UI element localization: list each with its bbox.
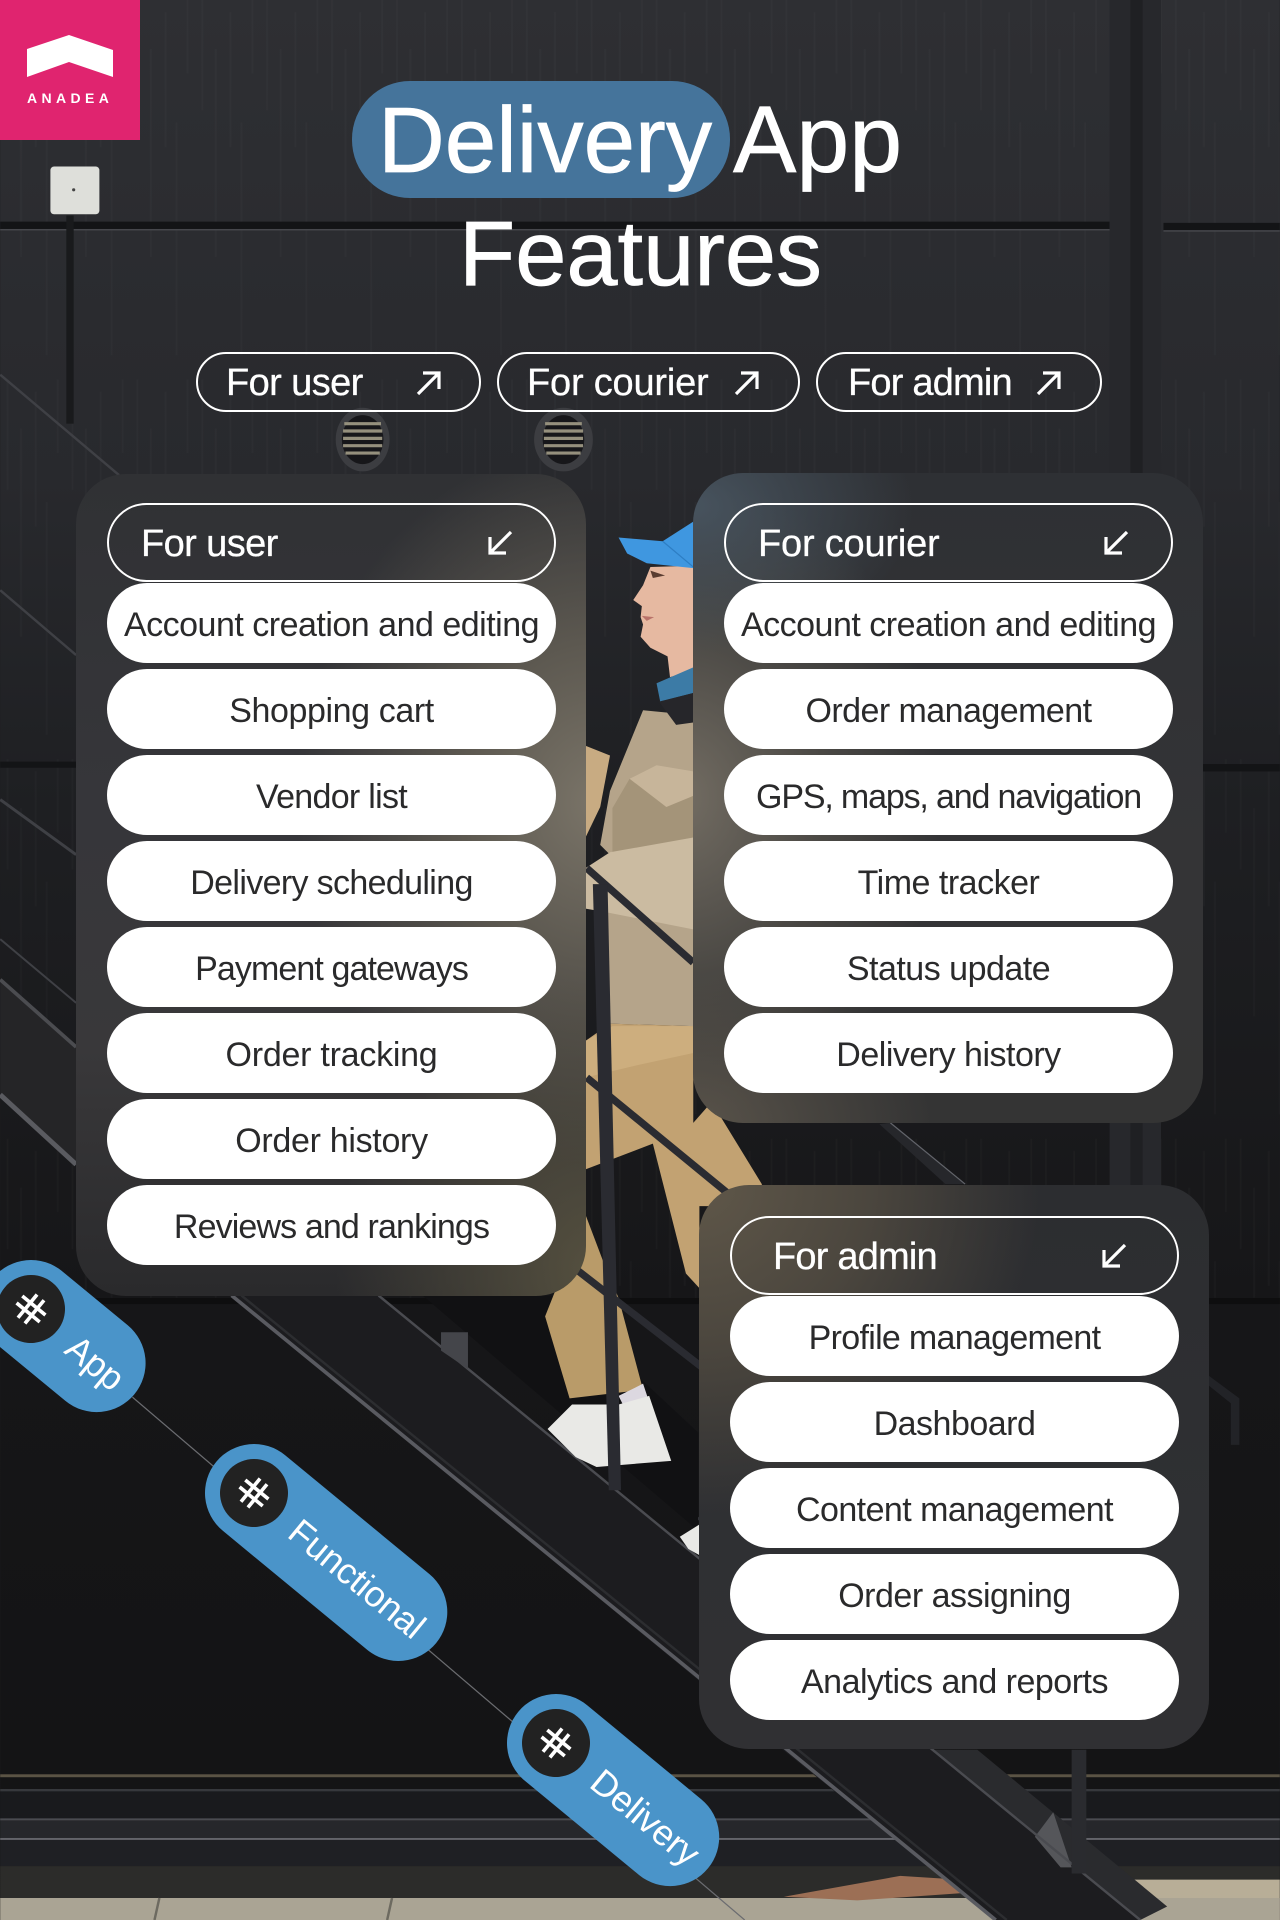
item: Shopping cart [229,692,434,730]
thin connecting line through the tags [132,1397,745,1920]
item: Status update [847,950,1050,988]
courier figure [545,522,762,1555]
item: GPS, maps, and navigation [756,778,1141,816]
item [724,1013,1173,1093]
sock [619,1384,649,1408]
logo mark [27,35,113,77]
item [730,1554,1179,1634]
item: Order tracking [226,1036,437,1074]
header: for courier: For courier [758,523,940,565]
title [352,81,902,305]
header: for user [107,503,556,582]
neck and face [633,566,693,677]
logo block [0,0,140,140]
wall vents [336,408,593,471]
stair rails at the left edge [0,980,76,1164]
item: Profile management [809,1319,1100,1357]
tag: app: App [58,1327,133,1399]
item: Order management [805,692,1092,730]
shoes [548,1396,671,1467]
item: Order assigning [838,1577,1071,1615]
item [724,755,1173,835]
item [107,841,556,921]
item: Vendor list [256,778,407,816]
staircase stringer [232,1296,1140,1920]
base trim and pavement [0,1774,1280,1777]
tag: app [0,1240,166,1432]
item: Order history [235,1122,428,1160]
panel: for user [76,474,586,1296]
item [724,583,1173,663]
tab: for courier [497,352,800,412]
sensor box and cable [50,167,99,214]
item [107,1185,556,1265]
header: for admin [730,1216,1179,1295]
tag: functional: Functional [281,1511,433,1647]
tab: for user [196,352,481,412]
item [724,669,1173,749]
tab: for admin [816,352,1102,412]
item: Account creation and editing [741,606,1156,644]
item: Analytics and reports [801,1663,1108,1701]
title highlight pill [352,81,730,198]
header: for user: For user [141,523,278,565]
item [730,1640,1179,1720]
logo wordmark: ANADEA [27,90,113,106]
item [107,669,556,749]
header: for admin: For admin [773,1236,937,1278]
item: Time tracker [858,864,1039,902]
item: Content management [796,1491,1113,1529]
item [724,927,1173,1007]
package box edge [586,746,610,838]
tag: functional [185,1424,467,1681]
item: Delivery scheduling [190,864,473,902]
item [730,1296,1179,1376]
lower right rail post [1073,1750,1085,1873]
cap [619,522,693,568]
item [730,1468,1179,1548]
title word: Features: Features [459,203,822,305]
trousers [586,1024,762,1288]
tag: delivery [487,1674,739,1906]
item: Reviews and rankings [174,1208,489,1246]
front handrail and post [572,868,730,1490]
panel: for admin [699,1185,1209,1749]
item: Delivery history [836,1036,1061,1074]
tag: delivery: Delivery [583,1761,708,1874]
tab: for courier: For courier [527,362,709,404]
item [730,1382,1179,1462]
back trouser leg [545,1215,643,1398]
wall seams [0,0,1280,1304]
item: Dashboard [874,1405,1035,1443]
item [107,1099,556,1179]
header: for courier [724,503,1173,582]
item [107,583,556,663]
title word: App: App [733,87,902,193]
item [107,927,556,1007]
tab: for admin: For admin [848,362,1012,404]
item [107,1013,556,1093]
tab: for user: For user [226,362,363,404]
item: Payment gateways [195,950,468,988]
item [107,755,556,835]
collar [657,667,693,702]
item: Account creation and editing [124,606,539,644]
jacket [600,710,693,1026]
panel: for courier [693,473,1203,1123]
item [724,841,1173,921]
title word: Delivery: Delivery [378,88,712,192]
